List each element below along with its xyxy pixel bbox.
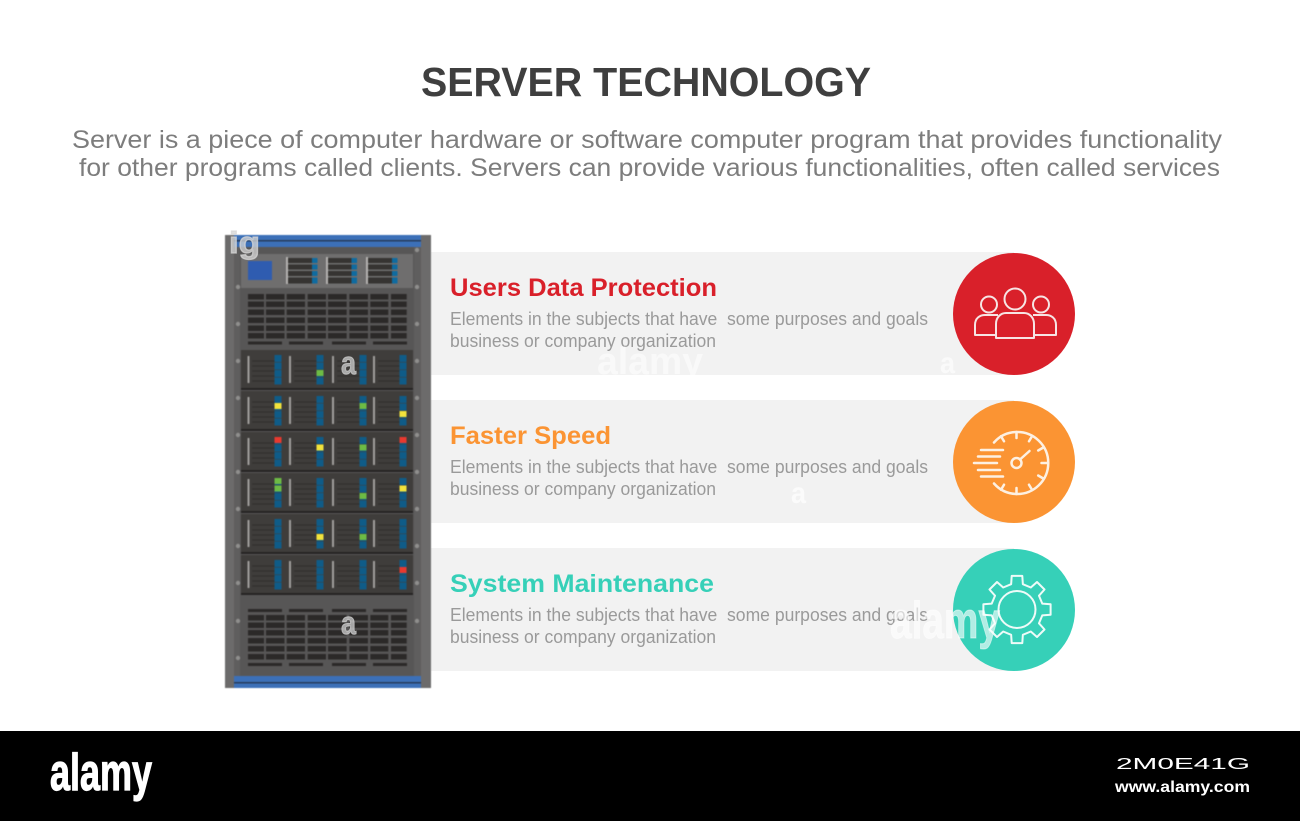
icon: users (975, 288, 1056, 338)
screws (236, 248, 419, 660)
footer band (0, 731, 1300, 821)
text block: system maintenance: Elements in the subjects that have some purposes and goals (450, 605, 928, 625)
panel: faster speed (431, 400, 1075, 523)
icon: gear (983, 576, 1051, 643)
status lights (274, 370, 406, 573)
text block: users data protection: business or company organization (450, 331, 716, 351)
text block: faster speed: Elements in the subjects that have some purposes and goals (450, 457, 928, 477)
watermarks (229, 225, 1000, 650)
website: www.alamy.com (1114, 779, 1250, 796)
watermarks: a (791, 477, 806, 510)
image id: 2M0E41G (1116, 756, 1250, 773)
panel: system maintenance (431, 548, 1075, 671)
text block: faster speed (450, 457, 928, 499)
circle: maintenance (953, 549, 1075, 671)
text block: faster speed: business or company organization (450, 479, 716, 499)
subtitle text block: Server is a piece of computer hardware or software computer program that provides functionality (72, 126, 1223, 154)
text block: users data protection: Elements in the subjects that have some purposes and goals (450, 309, 928, 329)
watermarks: alamy (890, 592, 1000, 650)
subtitle text block (72, 126, 1223, 182)
watermarks: a (341, 345, 356, 381)
circle: speed (953, 401, 1075, 523)
text block: users data protection (450, 309, 928, 351)
heading: faster speed: Faster Speed (450, 422, 611, 450)
circle: users (953, 253, 1075, 375)
watermarks: a (341, 605, 356, 641)
text block: system maintenance: business or company organization (450, 627, 716, 647)
watermarks: ig (229, 225, 260, 260)
server rack (225, 235, 431, 688)
panel: users data protection (431, 252, 1075, 375)
top control panel (241, 254, 413, 288)
server units (241, 350, 413, 595)
lower vent (248, 609, 407, 666)
title: SERVER TECHNOLOGY (421, 59, 871, 105)
upper vent (248, 294, 407, 344)
footer logo: alamy (50, 744, 152, 802)
heading: system maintenance: System Maintenance (450, 570, 714, 598)
watermarks: alamy (597, 341, 703, 383)
subtitle text block: for other programs called clients. Servers can provide various functionalities, often called services (79, 154, 1220, 182)
icon: speedometer (974, 432, 1048, 494)
top blue bar (234, 235, 421, 247)
heading: users data protection: Users Data Protection (450, 274, 717, 302)
bottom blue bar (234, 676, 421, 688)
watermarks: a (940, 347, 955, 380)
text block: system maintenance (450, 605, 928, 647)
